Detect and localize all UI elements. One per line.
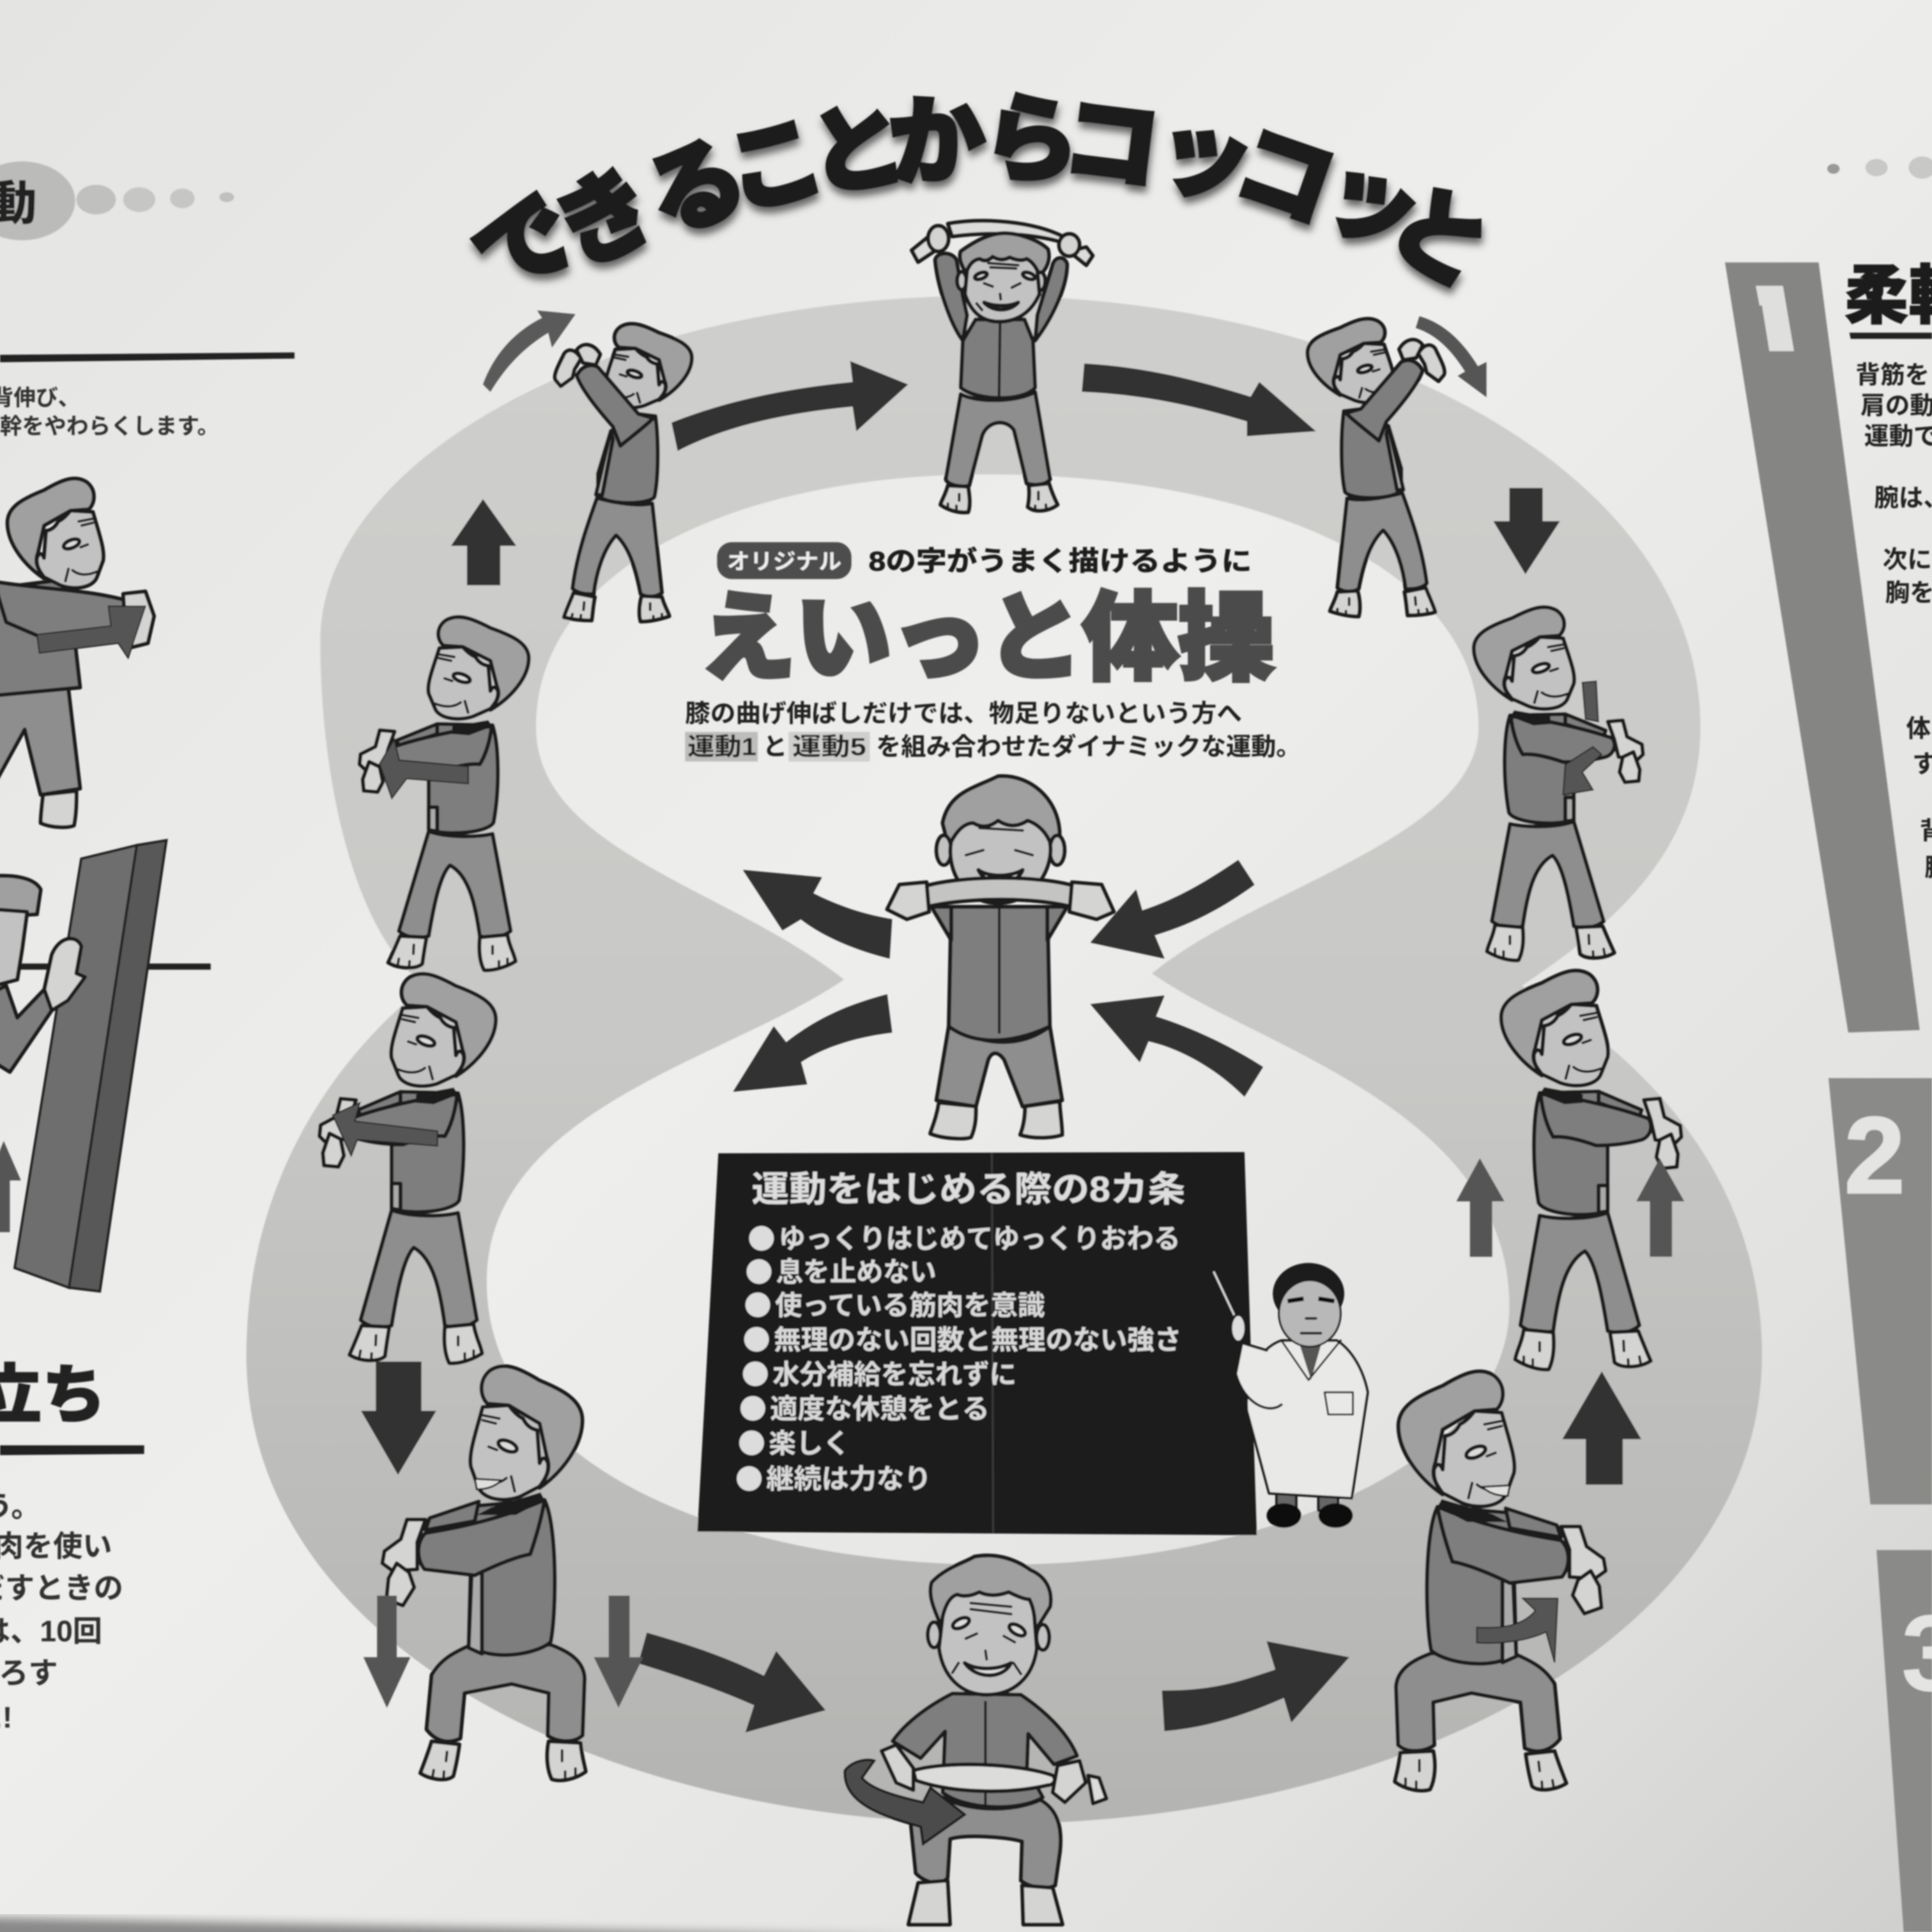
right column: decorative dots (1827, 157, 1932, 179)
arrow: top centre to top right (1082, 364, 1316, 436)
description: 膝の曲げ伸ばしだけでは、物足りないという方へ (685, 700, 1242, 728)
rule list: 息を止めない (776, 1257, 937, 1287)
badge: original (717, 542, 852, 579)
left column: hand on wall (44, 939, 85, 1010)
panel: exercise 2 tab (1828, 1078, 1932, 1505)
right column: body text: 次に (1883, 546, 1932, 574)
arrow: on left lower figure (333, 1103, 438, 1156)
arrow: thin up on right figure (1636, 1158, 1684, 1257)
left column: arrow on figure (37, 606, 146, 658)
arrow: curved small top left (483, 310, 576, 392)
bottom edge shadow (0, 1917, 937, 1932)
left column: wall pillar (15, 840, 166, 1291)
figure: centre stretching towel (887, 776, 1114, 1138)
right column: heading rule (1850, 333, 1932, 339)
description: 運動1 (687, 733, 756, 761)
arrow: bottom right big (1162, 1641, 1349, 1731)
arrow: centre upper left (743, 870, 892, 958)
left column: intro text: 幹をやわらくします。 (0, 414, 219, 439)
rule list: 適度な休憩をとる (770, 1394, 990, 1424)
figure: right lower standing (1501, 970, 1682, 1370)
description: を組み合わせたダイナミックな運動。 (876, 733, 1301, 761)
left column: small up arrow (0, 1141, 21, 1232)
figure: top centre arms raised with towel (912, 221, 1092, 512)
blackboard heading: 運動をはじめる際の8カ条 (751, 1169, 1185, 1209)
arrow: thin up right (1457, 1158, 1505, 1257)
left column: body text (0, 1490, 123, 1734)
panel: exercise 1 tab (1725, 263, 1920, 1032)
arrow: thin down beside left squat (594, 1596, 643, 1708)
left column: section badge with dots (0, 162, 234, 240)
arrow: centre lower right (1091, 995, 1263, 1096)
figure: right upper standing (1474, 607, 1643, 960)
rule bullets (737, 1226, 774, 1491)
rule list: 無理のない回数と無理のない強さ (774, 1325, 1181, 1355)
panel: blackboard eight rules (698, 1152, 1257, 1535)
right column: body text (1855, 362, 1932, 882)
description: 運動5 (792, 733, 866, 761)
rule list: 楽しく (769, 1429, 850, 1459)
arrow: up left top (451, 499, 516, 585)
figure: top left arms up side view (555, 324, 692, 622)
panel: exercise 2 tab: 2 (1844, 1094, 1905, 1216)
description (685, 700, 1301, 762)
left column: heading rule (0, 1445, 144, 1455)
arrow: up right lower (1562, 1371, 1641, 1485)
arrow: on left upper figure (379, 739, 468, 799)
arrow: down left lower (361, 1361, 436, 1475)
right column: body text: 背筋を (1855, 362, 1929, 389)
panel: exercise 3 tab (1876, 1550, 1932, 1932)
rule list: 水分補給を忘れずに (772, 1360, 1016, 1390)
rule list: 使っている筋肉を意識 (775, 1291, 1045, 1321)
figure: left upper standing (360, 617, 529, 970)
rule list: 継続は力なり (767, 1464, 931, 1494)
left column: intro text (0, 386, 219, 439)
figure: bottom right squat (1395, 1371, 1606, 1791)
figure-eight band (247, 296, 1762, 1823)
rule list: ゆっくりはじめてゆっくりおわる (779, 1224, 1181, 1254)
rule list (767, 1224, 1181, 1494)
arrow: top left to top centre (671, 361, 908, 451)
description: と (763, 733, 787, 761)
figure: top right arms up side view with arrow (1307, 316, 1487, 617)
figure: doctor with pointer (1214, 1263, 1368, 1528)
left column: body text: ろす (0, 1656, 58, 1689)
left column: horizontal line (0, 963, 211, 970)
arrow: centre upper right (1091, 860, 1254, 958)
right column: body text: 体 (1906, 715, 1931, 742)
badge: original: オリジナル (727, 550, 841, 574)
figure: bottom left squat (382, 1366, 586, 1781)
arrow: thin down on left squat (364, 1596, 410, 1708)
main arched title: できることからコッコッと (457, 84, 1509, 317)
left column: figure pressing wall (0, 876, 52, 1072)
left column: figure with arm extended (0, 479, 154, 827)
left column: rule (0, 353, 295, 362)
subtitle: 8の字がうまく描けるように (869, 546, 1252, 576)
arrow: bottom left big (638, 1632, 825, 1733)
arrow: centre lower left (733, 994, 892, 1092)
arrow: down right top (1493, 488, 1560, 574)
figure: left lower standing (319, 974, 496, 1363)
main heading: えいっと体操 (700, 585, 1274, 692)
figure: bottom centre seated with towel (845, 1556, 1107, 1924)
